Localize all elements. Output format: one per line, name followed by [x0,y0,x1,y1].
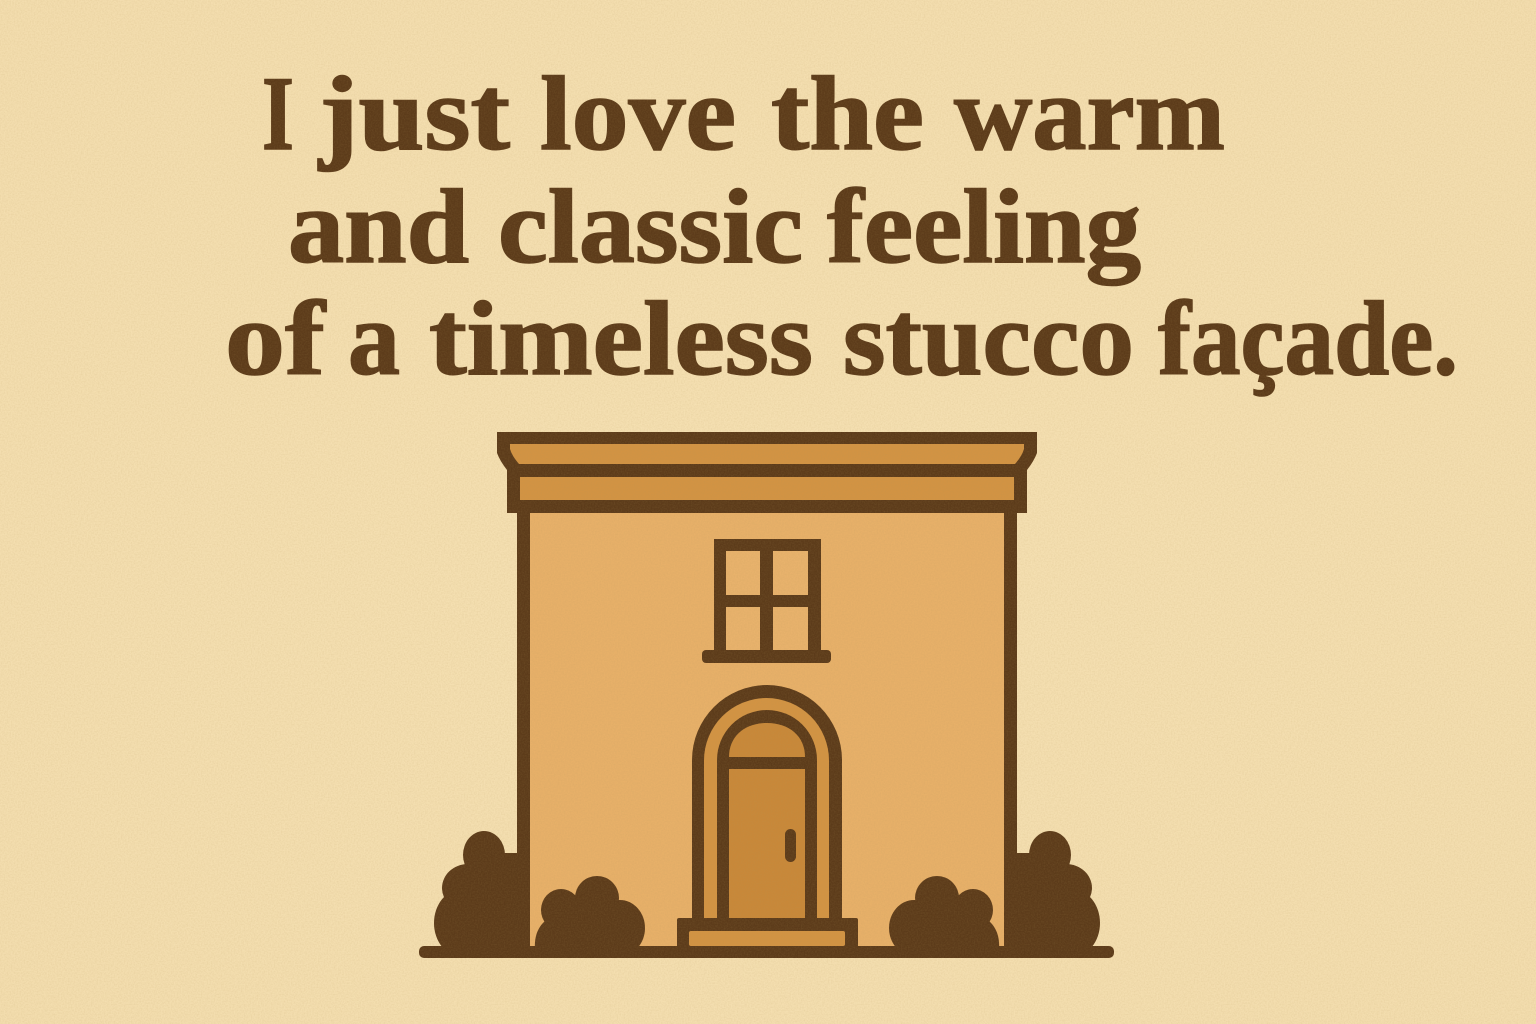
ground line [419,946,1114,958]
title: classic [498,168,803,285]
cornice [497,432,1037,513]
title [225,55,1458,397]
title: love [540,55,736,172]
window [702,539,831,663]
title: and [288,168,469,285]
wall [517,505,1017,950]
title: just [318,55,510,172]
title: a [348,280,400,397]
door handle [785,829,796,862]
shrubs left [434,831,645,957]
title: warm [954,55,1225,172]
title: the [771,55,924,172]
title: I [262,55,294,172]
door step [677,918,858,954]
title: timeless [429,280,813,397]
shrubs right [889,831,1100,957]
building illustration [419,432,1114,958]
title: of [225,280,327,397]
title: façade. [1158,280,1458,397]
door with arch [692,685,842,925]
title: feeling [827,168,1141,285]
title: stucco [843,280,1134,397]
